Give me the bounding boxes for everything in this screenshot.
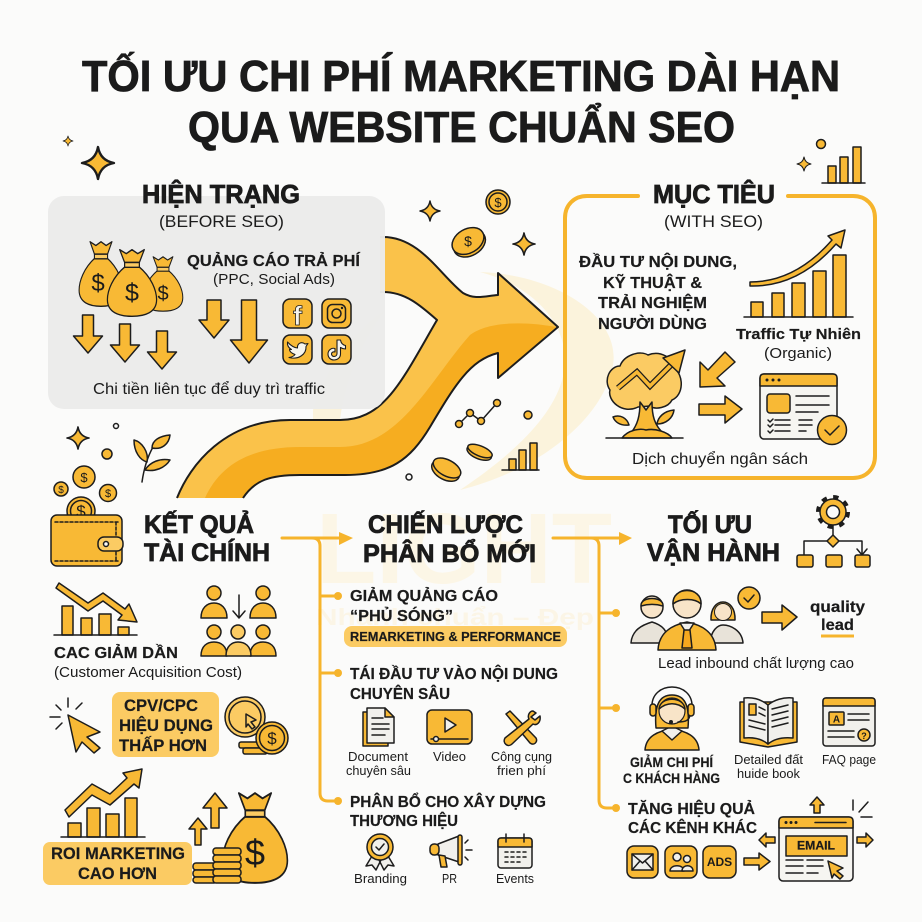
icon: arrow to quality lead: [762, 605, 797, 630]
icon: right arrow: [699, 396, 742, 423]
item: reduce broad ads: GIẢM QUẢNG CÁO: [350, 588, 498, 605]
column: new allocation strategy: [344, 510, 567, 886]
text: paid ads: [187, 251, 361, 288]
item: brand building: [350, 793, 546, 830]
text: investment focus: [579, 253, 737, 333]
connector: strategy to operations: [553, 532, 632, 812]
callout: lower CPV CPC: THẤP HƠN: [119, 736, 207, 755]
text: investment focus: KỸ THUẬT &: [603, 274, 702, 292]
icon: email window: [779, 817, 853, 881]
title: [82, 50, 840, 152]
text: paid ads: (PPC, Social Ads): [213, 271, 335, 288]
item: reduce broad ads: [344, 588, 567, 647]
icon: group of people with down arrow: [201, 586, 276, 656]
column: operations optimisation: [623, 498, 876, 881]
heading: target: MỤC TIÊU: [653, 179, 775, 209]
icon: wallet with coins: $: [80, 470, 88, 485]
item: brand building: PHÂN BỔ CHO XÂY DỰNG: [350, 793, 546, 811]
item: reinvest in content: TÁI ĐẦU TƯ VÀO NỘI DUNG: [350, 665, 558, 683]
item: brand building: THƯƠNG HIỆU: [350, 812, 458, 830]
icon: lead people: [631, 587, 760, 650]
icon: wallet with coins: $: [105, 488, 111, 500]
heading: operations optimisation: VẬN HÀNH: [647, 537, 780, 567]
label: free tools: [491, 750, 552, 778]
icon: gear workflow: [797, 498, 870, 567]
icon: wallet with coins: $: [76, 502, 86, 521]
icon: social networks: f: [293, 301, 303, 331]
icon: megaphone: [430, 835, 472, 867]
icon: wallet with coins: [51, 466, 123, 566]
caption: continuous spend: Chi tiền liên tục để duy trì traffic: [93, 381, 325, 398]
text: investment focus: NGƯỜI DÙNG: [598, 315, 707, 333]
heading: financial results: TÀI CHÍNH: [144, 538, 270, 567]
column: financial results: [43, 466, 288, 885]
text: improve other channels: CÁC KÊNH KHÁC: [628, 819, 757, 837]
text: improve other channels: TĂNG HIỆU QUẢ: [628, 800, 755, 818]
icon: community channel: [665, 846, 697, 878]
icon: money bags: [79, 242, 183, 316]
caption: inbound leads: Lead inbound chất lượng cao: [658, 656, 854, 672]
icon: three down arrows: [74, 315, 176, 369]
icon: wallet with coins: $: [58, 485, 64, 496]
icon: FAQ window: ?: [861, 731, 867, 741]
icon: ads channel: [703, 846, 736, 878]
label: document: Document: [348, 750, 409, 764]
heading: new allocation strategy: PHÂN BỔ MỚI: [363, 538, 536, 568]
icon: money bags: $: [125, 279, 139, 307]
title: QUA WEBSITE CHUẨN SEO: [188, 101, 735, 152]
heading: operations optimisation: [647, 509, 780, 567]
heading: operations optimisation: TỐI ƯU: [668, 509, 752, 539]
heading: financial results: [144, 509, 270, 567]
icon: diagonal arrow: [700, 352, 735, 387]
icon: growing money bag: [189, 793, 287, 883]
callout: higher marketing ROI: ROI MARKETING: [51, 845, 185, 863]
icon: ads channel: ADS: [707, 855, 732, 869]
connector: results to strategy: [282, 532, 353, 805]
icon: email window: EMAIL: [797, 838, 835, 852]
callout: higher marketing ROI: [43, 842, 192, 885]
icon: branding badge: [366, 834, 394, 870]
label: branding: Branding: [354, 872, 407, 886]
label: document: chuyên sâu: [346, 764, 411, 778]
label: events: Events: [496, 872, 534, 886]
text: paid ads: QUẢNG CÁO TRẢ PHÍ: [187, 251, 361, 270]
chart: falling CAC: [54, 583, 137, 635]
panel: current state before SEO: [48, 179, 385, 409]
callout: lower CPV CPC: [112, 692, 219, 757]
text: quality lead: quality: [810, 599, 865, 616]
heading: new allocation strategy: CHIẾN LƯỢC: [368, 510, 523, 539]
heading: new allocation strategy: [363, 510, 536, 568]
chart: rising ROI: [61, 769, 145, 837]
text: reduce customer cost: GIẢM CHI PHÍ: [630, 755, 714, 770]
callout: lower CPV CPC: HIỆU DỤNG: [119, 716, 213, 735]
text: organic traffic: Traffic Tự Nhiên: [736, 326, 861, 343]
icon: growing money bag: $: [245, 832, 265, 873]
label: guide book: Detailed đất: [734, 753, 804, 767]
chart: rising organic traffic: [744, 230, 853, 317]
callout: higher marketing ROI: CAO HƠN: [78, 865, 157, 883]
item: reduce broad ads: “PHỦ SÓNG”: [350, 607, 453, 625]
icon: money bags: $: [157, 283, 169, 305]
icon: document: [363, 708, 394, 746]
icon: guide book: [740, 698, 797, 747]
icon: mail channel: [627, 846, 658, 878]
label: document: [346, 750, 411, 778]
text: quality lead: [810, 599, 865, 636]
icon: social networks: [283, 299, 351, 364]
text: organic traffic: [736, 326, 861, 362]
decorative sparkles, coins and mini charts around the arrow: $: [464, 233, 472, 249]
icon: growth tree: [606, 350, 685, 438]
callout: lower CPV CPC: CPV/CPC: [124, 696, 198, 715]
label: PR: PR: [442, 872, 457, 886]
icon: arrow to email: [744, 853, 770, 870]
icon: support agent: [645, 687, 699, 750]
icon: FAQ window: A: [833, 714, 840, 726]
panel: target with SEO: [565, 179, 875, 478]
big merging arrow: [177, 237, 558, 498]
text: organic traffic: (Organic): [764, 345, 832, 362]
icon: money bags: $: [91, 270, 105, 297]
icon: events calendar: [498, 834, 532, 868]
heading: current state: HIỆN TRẠNG: [142, 179, 300, 209]
label: free tools: Công cụng: [491, 750, 552, 764]
icon: click coins: [225, 697, 288, 754]
decorative sparkles, coins and mini charts around the arrow: $: [494, 195, 502, 210]
heading: target: [653, 179, 775, 231]
icon: arrows and sparks around email: [759, 797, 873, 847]
icon: click coins: $: [267, 729, 277, 748]
heading: target: (WITH SEO): [664, 212, 763, 231]
heading: current state: (BEFORE SEO): [159, 212, 284, 231]
text: reduce customer cost: C KHÁCH HÀNG: [623, 771, 720, 786]
text: reduce customer cost: [623, 755, 720, 786]
icon: two large down arrows: [199, 300, 268, 363]
decorative sparkles, coins and mini charts around the arrow: [63, 136, 865, 486]
item: reinvest in content: CHUYÊN SÂU: [350, 685, 450, 703]
label: free tools: frien phí: [497, 764, 547, 778]
label: guide book: huide book: [737, 767, 801, 781]
watermark logo: Nhanh chuẩn – Đẹp: [316, 604, 594, 630]
text: investment focus: TRẢI NGHIỆM: [598, 294, 707, 312]
title: TỐI ƯU CHI PHÍ MARKETING DÀI HẠN: [82, 50, 840, 101]
text: improve other channels: [628, 800, 757, 837]
caption: budget shift: Dịch chuyển ngân sách: [632, 451, 808, 468]
heading: current state: [142, 179, 300, 231]
watermark logo: LIGHT: [316, 493, 612, 605]
item: reduce broad ads: REMARKETING & PERFORMANCE: [350, 629, 561, 644]
text: quality lead: lead: [821, 617, 854, 634]
icon: video: [427, 710, 472, 744]
heading: financial results: KẾT QUẢ: [144, 509, 254, 539]
label: FAQ page: FAQ page: [822, 753, 876, 767]
icon: website with check: [760, 374, 846, 444]
item: reinvest in content: [350, 665, 558, 703]
icon: FAQ window: [823, 698, 875, 746]
label: guide book: [734, 753, 804, 781]
icon: clicking cursor: [50, 698, 100, 753]
text: CAC reduction: CAC GIẢM DẦN: [54, 645, 178, 662]
label: video: Video: [433, 750, 466, 764]
watermark logo: [313, 272, 614, 630]
icon: tools: [504, 711, 540, 745]
text: CAC reduction: [54, 645, 242, 681]
text: CAC reduction: (Customer Acquisition Cost): [54, 665, 242, 681]
text: investment focus: ĐẦU TƯ NỘI DUNG,: [579, 253, 737, 271]
